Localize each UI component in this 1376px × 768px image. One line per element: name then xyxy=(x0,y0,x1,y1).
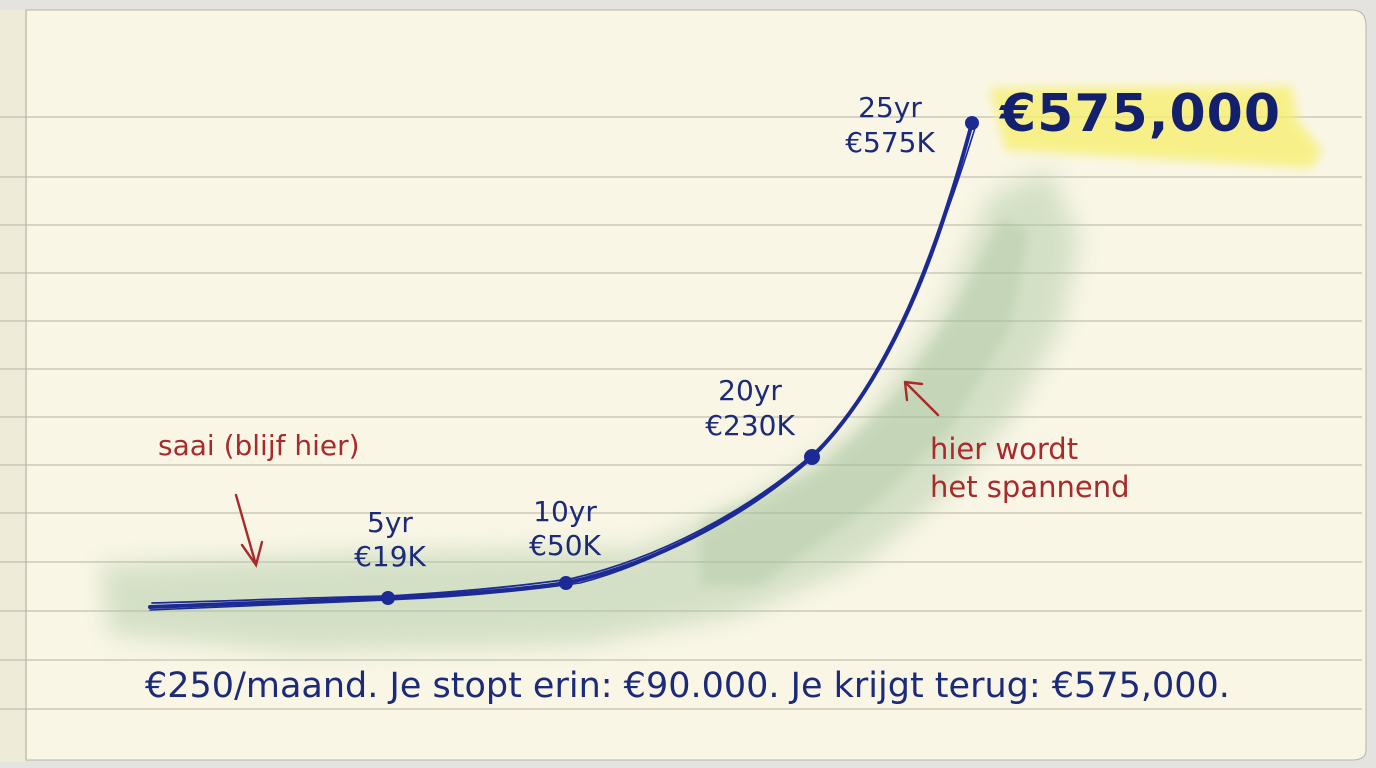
label: 5yr: 5yr xyxy=(367,506,413,539)
label: 20yr: €230K xyxy=(705,409,795,442)
label: 25yr: €575K xyxy=(845,126,935,159)
label: 10yr: 10yr xyxy=(533,495,597,528)
annotation: boring: saai (blijf hier) xyxy=(158,429,360,462)
label: 25yr xyxy=(845,91,936,159)
annotation: exciting xyxy=(930,432,1130,504)
label: 25yr: 25yr xyxy=(858,91,922,124)
label: 10yr: €50K xyxy=(529,529,601,562)
annotation: exciting: het spannend xyxy=(930,470,1130,504)
summary text: €250/maand. Je stopt erin: €90.000. Je krijgt terug: €575,000. xyxy=(145,666,1230,706)
label: 10yr xyxy=(529,495,602,562)
label: 20yr: 20yr xyxy=(718,374,782,407)
label: 20yr xyxy=(705,374,796,442)
annotation: exciting: hier wordt xyxy=(930,432,1078,466)
headline value: €575,000 xyxy=(1000,84,1281,144)
label: 5yr xyxy=(354,506,426,573)
label: 5yr: €19K xyxy=(354,540,426,573)
